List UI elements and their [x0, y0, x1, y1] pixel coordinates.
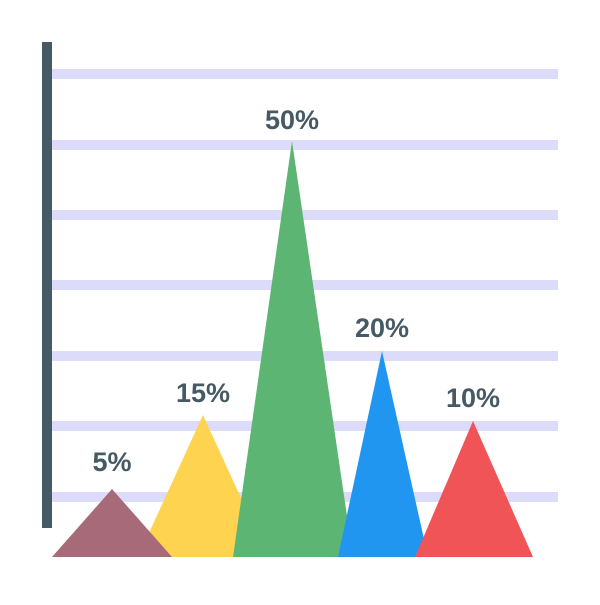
chart: triangles	[52, 141, 533, 557]
triangle: 50% green	[233, 141, 353, 557]
y axis	[42, 42, 52, 528]
triangle: 10% red	[415, 421, 533, 557]
triangle: 5% mauve	[52, 489, 172, 557]
labels	[92, 105, 500, 477]
labels: 50%	[265, 105, 319, 135]
labels: 20%	[355, 313, 409, 343]
labels: 10%	[446, 383, 500, 413]
labels: 15%	[176, 378, 230, 408]
triangle: 20% blue	[338, 351, 428, 557]
triangle: 15% yellow	[138, 415, 268, 557]
labels: 5%	[92, 447, 132, 477]
